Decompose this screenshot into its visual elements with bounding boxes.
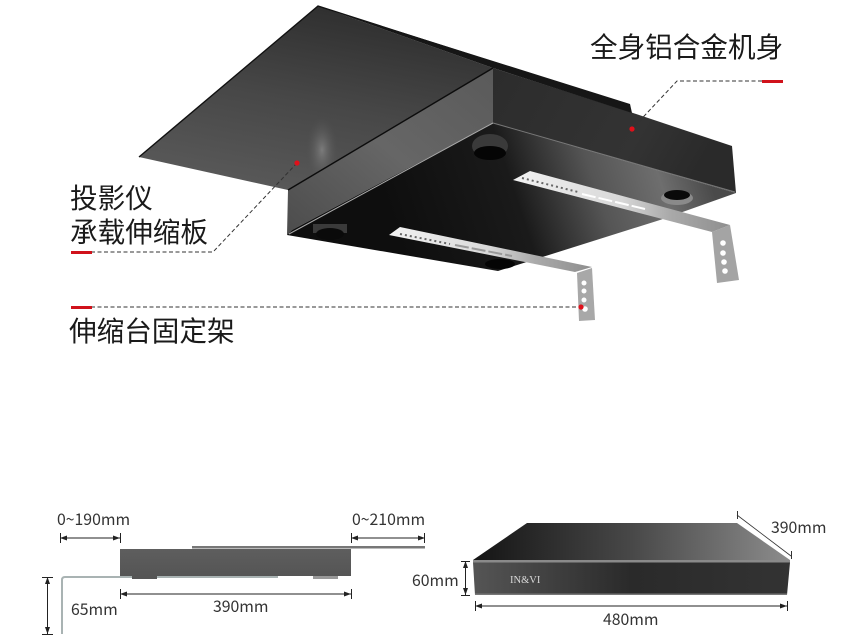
label: projector: 投影仪: [70, 176, 153, 216]
main product: projector telescopic mount: [139, 6, 739, 321]
dimension: 65mm: 65mm: [71, 597, 118, 620]
side view device: [62, 546, 425, 634]
dimension: 390mm depth: [120, 589, 352, 617]
dimension: 60mm: [412, 561, 470, 596]
leader line: [91, 163, 297, 252]
dimension: 480mm: [475, 601, 788, 630]
callout: fixing bracket: [69, 304, 584, 349]
telescopic plate: [139, 6, 493, 190]
dimension: 480mm: 480mm: [603, 607, 659, 630]
dimension: 0~190mm: [57, 507, 130, 543]
body underside: [287, 123, 736, 271]
label: fixing bracket: 伸缩台固定架: [69, 309, 235, 349]
label: telescopic plate: 承载伸缩板: [70, 210, 208, 250]
body front face: [287, 68, 493, 235]
dimension: 65mm: [42, 577, 118, 634]
dimension: 390mm depth: 390mm: [213, 594, 269, 617]
leader line: [91, 306, 581, 308]
logo: IN&VI: [510, 575, 541, 586]
rear bracket: [513, 171, 739, 283]
foot: center: [472, 134, 508, 160]
aluminium body right face: [493, 68, 736, 193]
callout: projector telescopic plate: [70, 160, 300, 254]
foot: bottom: [485, 259, 515, 269]
closed device: [473, 523, 790, 595]
callout: aluminium body: [590, 25, 783, 132]
leader line: [632, 81, 762, 129]
closed device dimension drawing: [412, 511, 827, 630]
dimension: 390mm width: 390mm: [771, 515, 827, 538]
label: aluminium body: 全身铝合金机身: [590, 25, 783, 65]
dimension: 60mm: 60mm: [412, 568, 459, 591]
foot: left: [313, 224, 347, 240]
dimension: 0~210mm: [351, 507, 425, 543]
dimension: 0~210mm: 0~210mm: [352, 507, 425, 530]
side dimension drawing: [42, 507, 425, 634]
dimension: 0~190mm: 0~190mm: [57, 507, 130, 530]
front bracket: [389, 227, 595, 321]
foot: right: [661, 190, 693, 205]
dimension: 390mm width: [737, 511, 827, 559]
